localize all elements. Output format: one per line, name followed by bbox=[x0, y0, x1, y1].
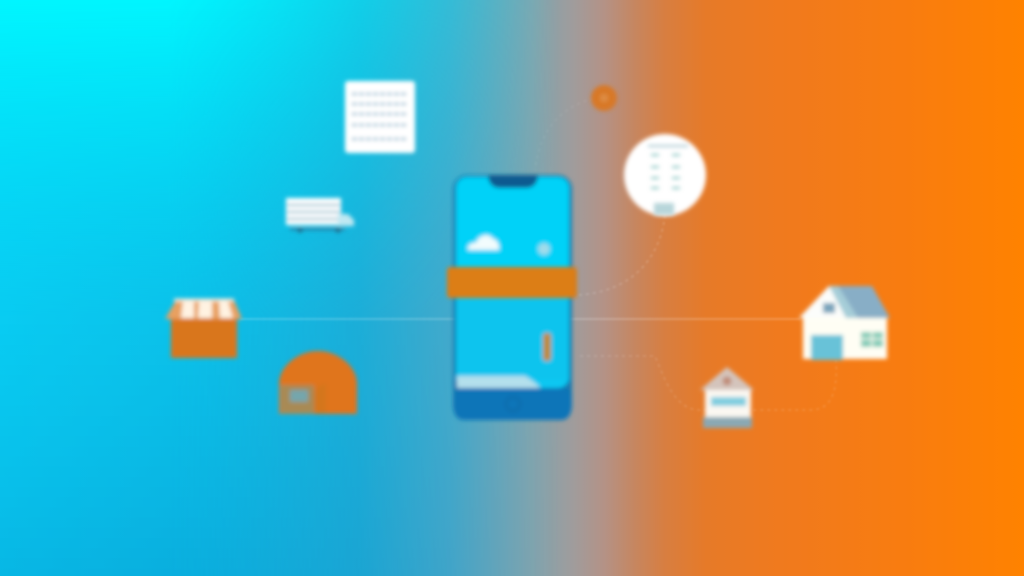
icon: small cloud on phone bbox=[538, 243, 550, 255]
icon: building in white circle bbox=[624, 134, 706, 216]
icon: large house bbox=[799, 286, 890, 360]
icon: small orange circle bbox=[591, 85, 617, 111]
icon: small marker on phone bbox=[543, 333, 551, 361]
connector lines bbox=[240, 97, 836, 410]
icon: cloud on phone bbox=[468, 235, 499, 250]
banner: orange band across phone bbox=[447, 267, 577, 298]
icon: document bbox=[345, 81, 415, 153]
icon: small house bbox=[700, 367, 754, 428]
icon: phone bbox=[453, 175, 572, 420]
snow ground on phone bbox=[457, 376, 540, 388]
icon: market stall bbox=[165, 300, 242, 358]
icon: delivery truck bbox=[286, 198, 354, 232]
icon: orange barn bbox=[279, 351, 357, 414]
